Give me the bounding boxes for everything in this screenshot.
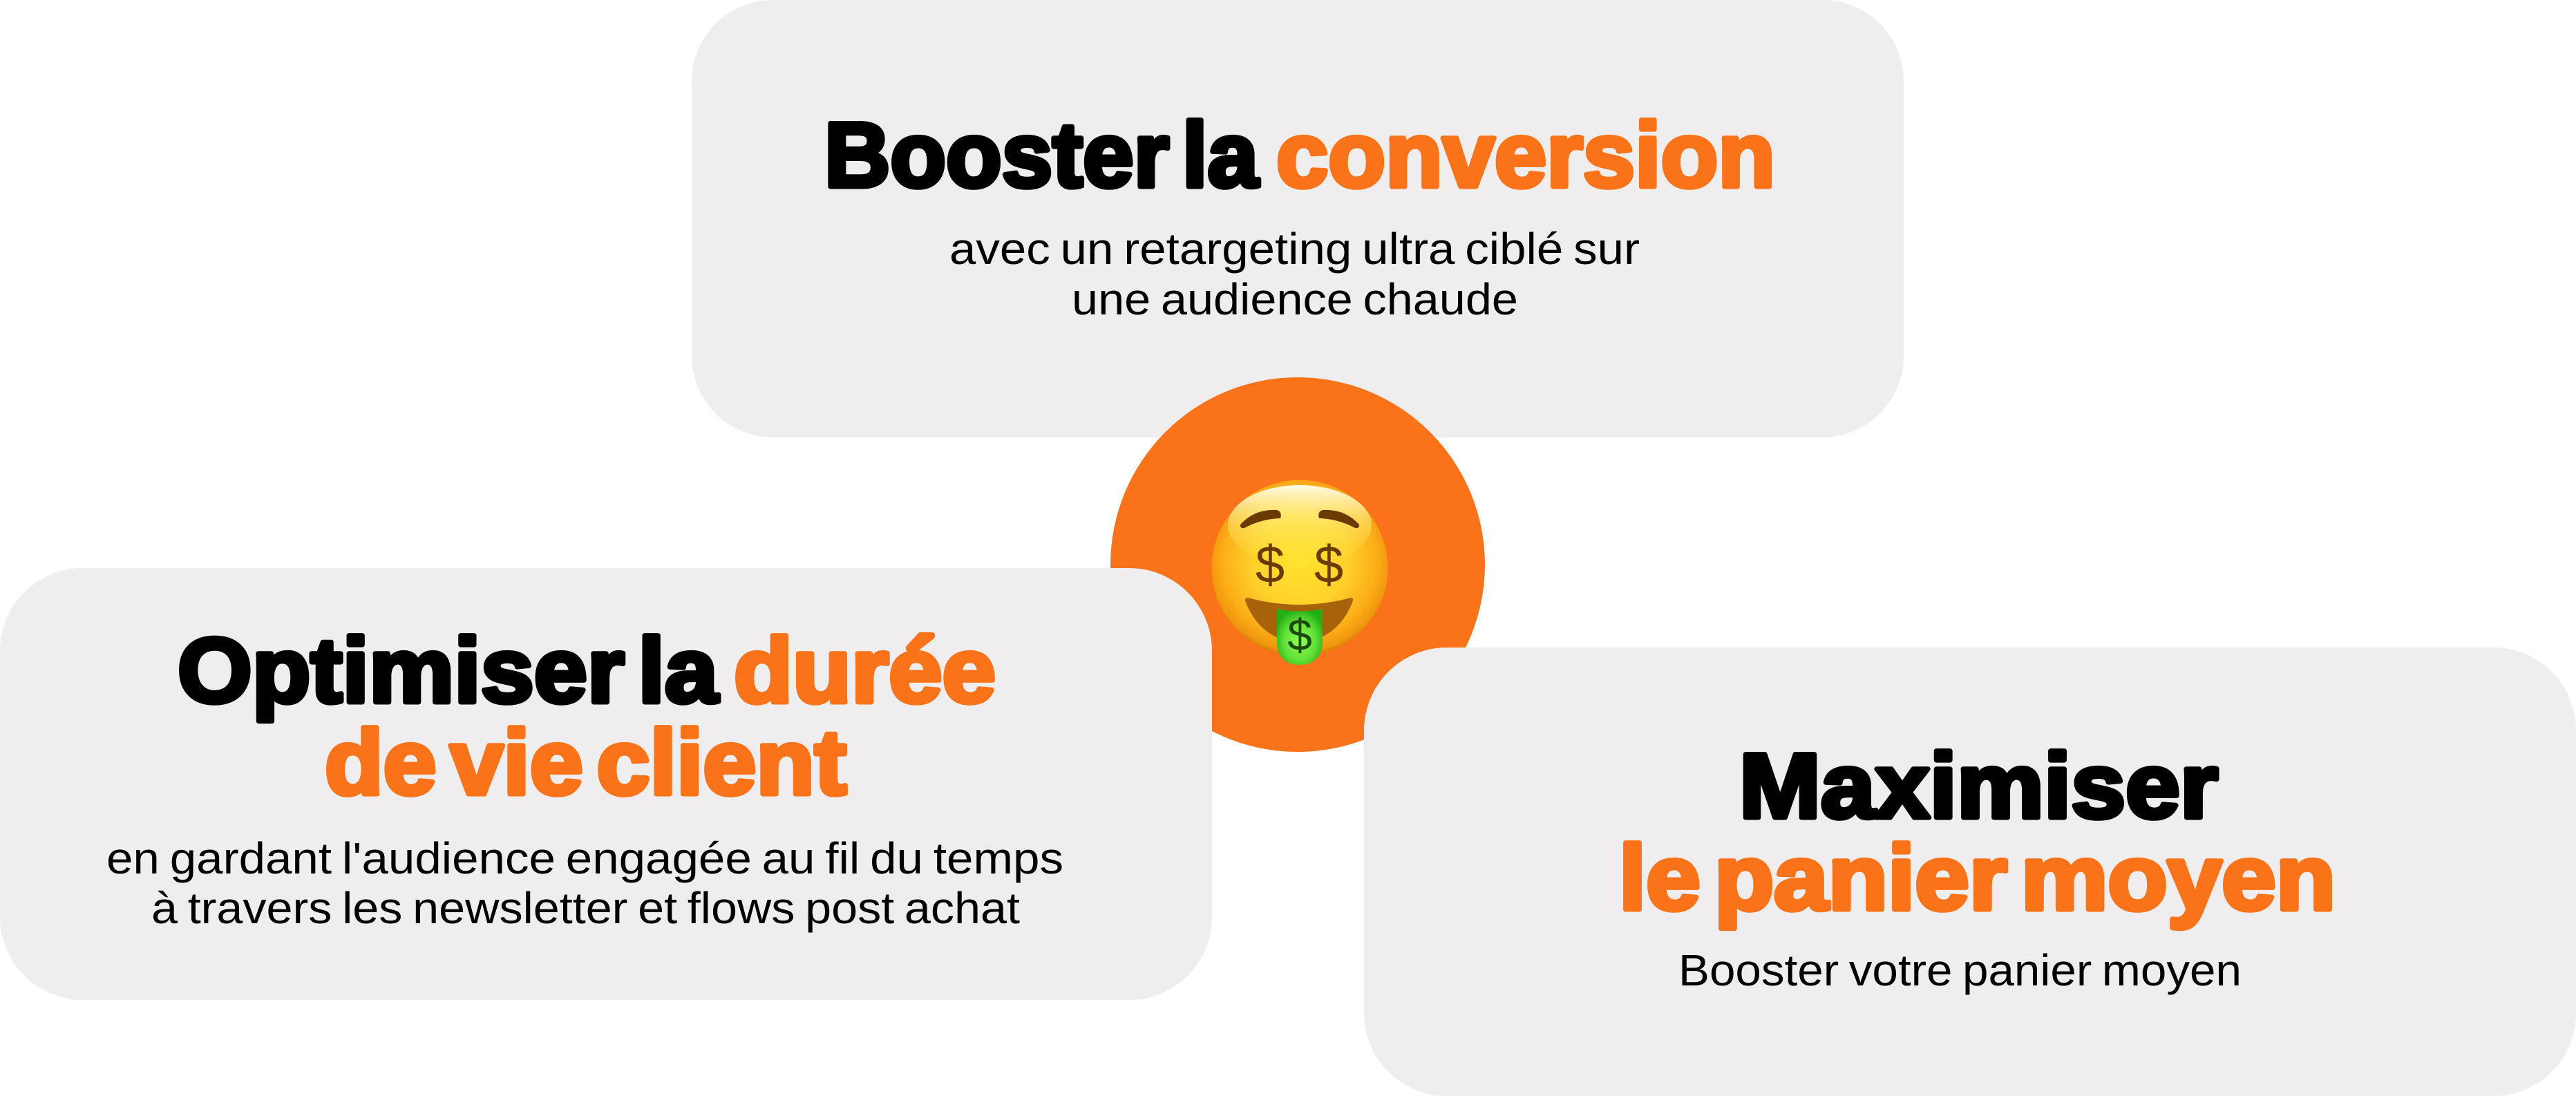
icon: dollar eyes — [1256, 536, 1343, 594]
icon: mouth — [1245, 598, 1353, 643]
heading: Optimiser la durée de vie client: de vie client — [325, 712, 846, 814]
heading: Optimiser la durée de vie client — [178, 620, 996, 814]
center orange circle — [1110, 377, 1485, 752]
text: left card description: à travers les newsletter et flows post achat — [151, 883, 1020, 933]
text: left card description — [106, 833, 1063, 933]
heading: Booster la conversion: conversion — [1276, 104, 1775, 207]
heading: Booster la conversion: Booster la — [824, 104, 1259, 207]
heading: Optimiser la durée de vie client: Optimiser la — [178, 620, 719, 722]
icon: eyebrows — [1240, 510, 1359, 528]
heading: Maximiser le panier moyen: Maximiser — [1739, 735, 2218, 838]
heading: Maximiser le panier moyen: le panier moyen — [1619, 827, 2336, 929]
text: top card description: avec un retargeting ultra ciblé sur — [949, 224, 1640, 274]
heading: Optimiser la durée de vie client: durée — [734, 620, 996, 722]
text: top card description: une audience chaude — [1072, 274, 1518, 324]
panel: top card — [692, 0, 1904, 437]
text: right card description: Booster votre panier moyen — [1678, 945, 2242, 995]
heading: Booster la conversion — [824, 104, 1775, 207]
icon: money-mouth face emoji — [1212, 480, 1388, 665]
text: left card description: en gardant l'audience engagée au fil du temps — [106, 833, 1063, 883]
icon: dollar tongue — [1277, 609, 1323, 665]
icon: dollar tongue: $ — [1287, 610, 1312, 660]
icon: dollar eyes: $ — [1314, 536, 1343, 594]
heading: Maximiser le panier moyen — [1619, 735, 2336, 929]
icon: dollar eyes: $ — [1256, 536, 1285, 594]
panel: left card — [0, 568, 1212, 1000]
panel: right card — [1364, 648, 2576, 1096]
text: top card description — [949, 224, 1640, 324]
